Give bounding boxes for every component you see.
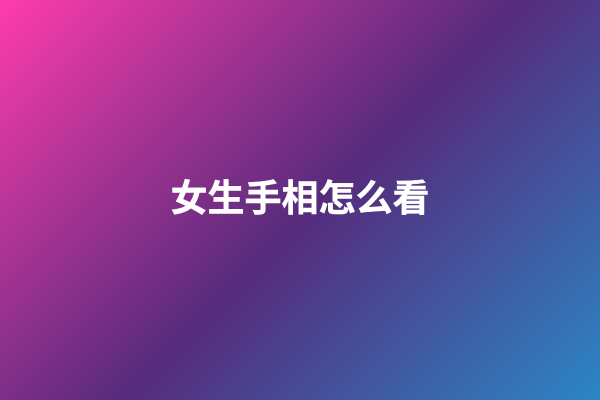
title: 女生手相怎么看 bbox=[170, 178, 430, 219]
